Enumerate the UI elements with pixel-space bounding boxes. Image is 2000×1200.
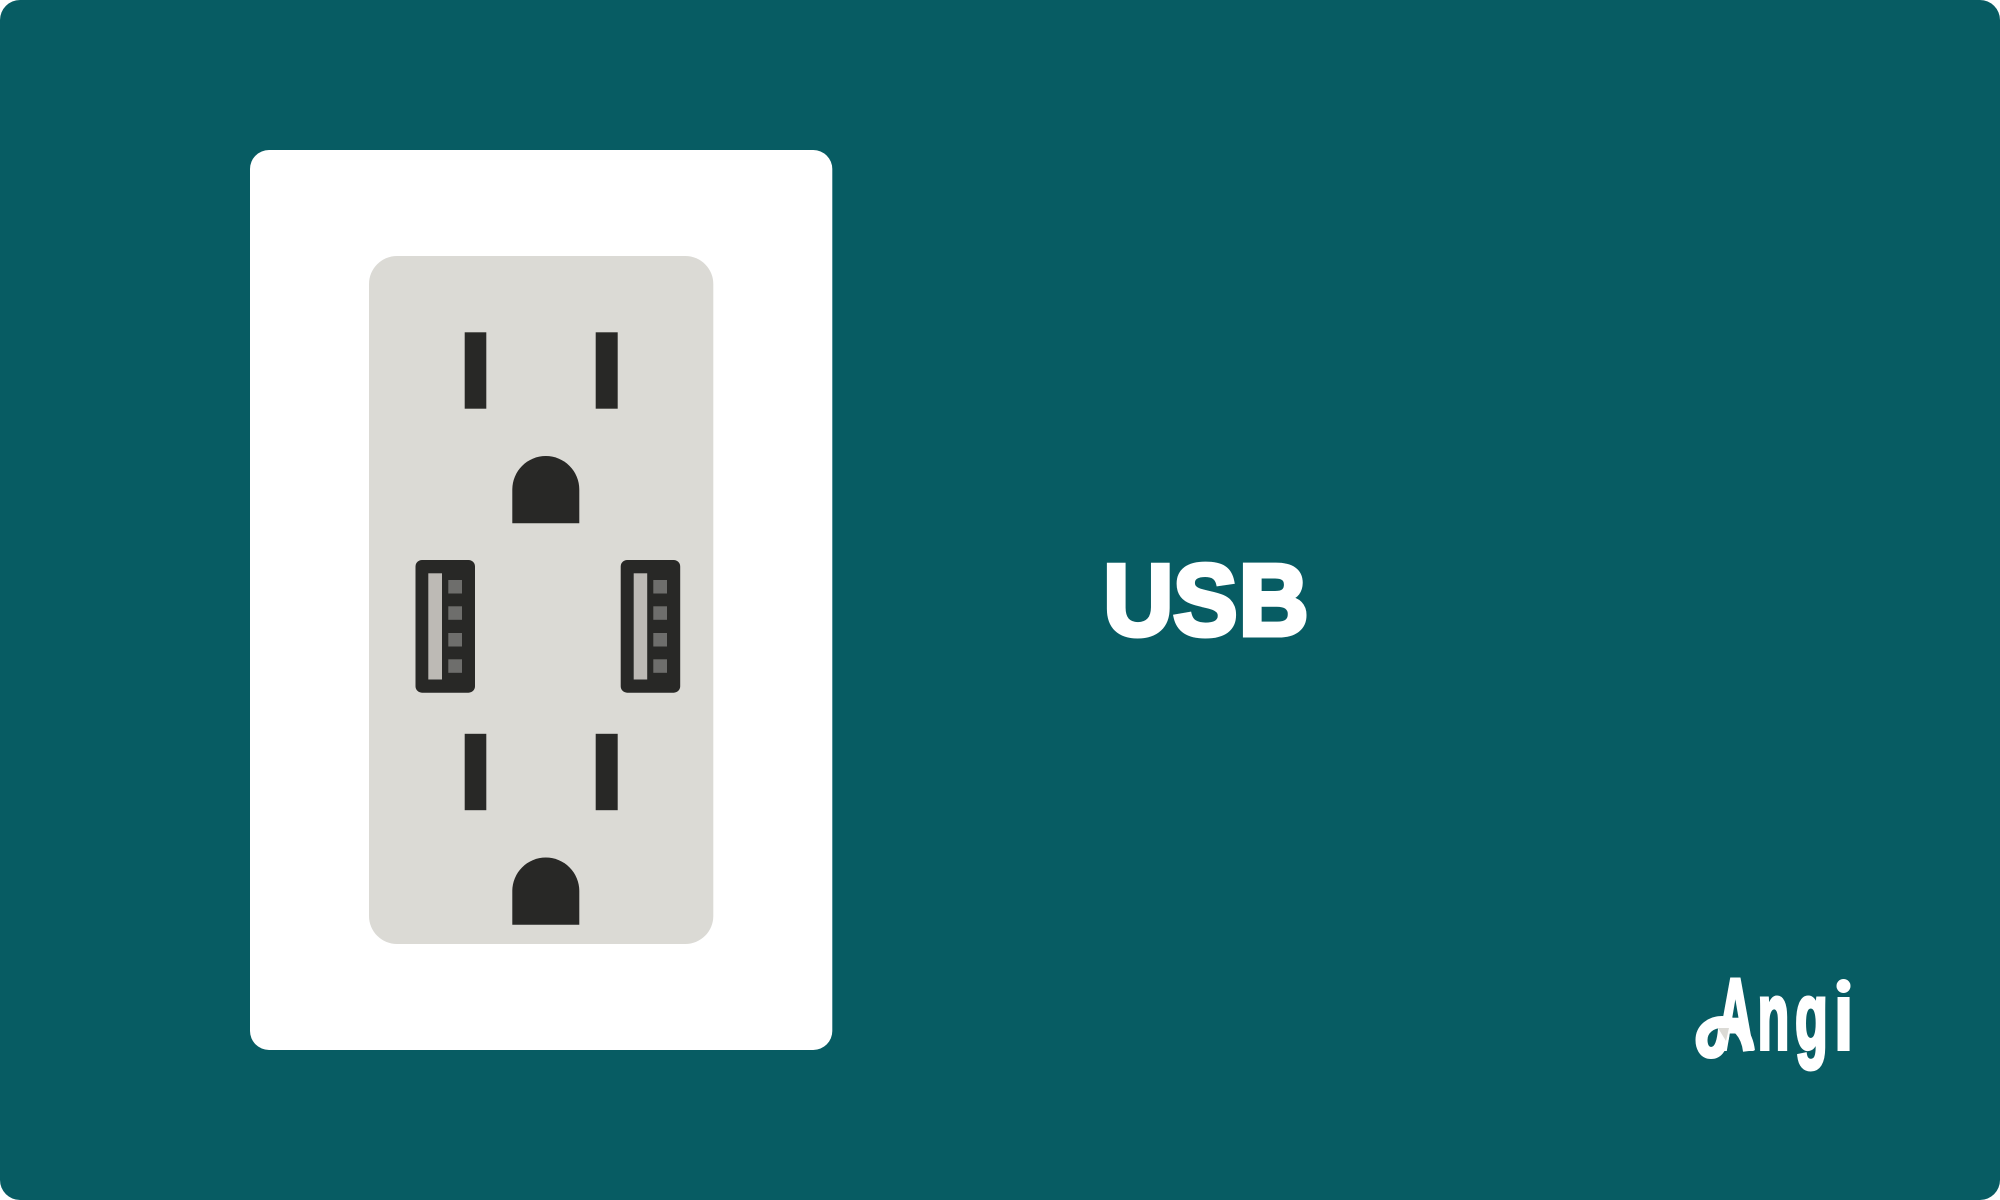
logo swash bbox=[1702, 1022, 1749, 1053]
right USB port bbox=[621, 560, 680, 693]
right port housing bbox=[621, 560, 680, 693]
logo letter g: g bbox=[1795, 964, 1828, 1070]
white wall plate bbox=[250, 150, 832, 1050]
upper left slot bbox=[465, 332, 486, 409]
outlet illustration bbox=[250, 150, 832, 1050]
left port contacts bbox=[448, 580, 462, 673]
lower right slot bbox=[596, 734, 618, 810]
left port tongue bbox=[428, 573, 442, 680]
left USB port bbox=[416, 560, 475, 693]
logo letter n: n bbox=[1758, 963, 1789, 1070]
title: USB: USB bbox=[1104, 544, 1309, 657]
logo fold accent bbox=[1718, 1028, 1729, 1041]
logo i dot bbox=[1836, 979, 1850, 993]
left port housing bbox=[416, 560, 475, 693]
lower ground hole bbox=[512, 858, 579, 925]
lower receptacle bbox=[465, 734, 618, 925]
upper right slot bbox=[596, 332, 618, 409]
lower left slot bbox=[465, 734, 486, 810]
right port contacts bbox=[653, 580, 667, 673]
logo letter i: i bbox=[1834, 962, 1853, 1070]
logo letter A: A bbox=[1718, 959, 1753, 1070]
grey outlet face bbox=[369, 256, 713, 944]
Angi logo bbox=[1696, 978, 1850, 1072]
upper receptacle bbox=[465, 332, 618, 523]
right port tongue bbox=[634, 573, 647, 680]
upper ground hole bbox=[512, 456, 579, 523]
